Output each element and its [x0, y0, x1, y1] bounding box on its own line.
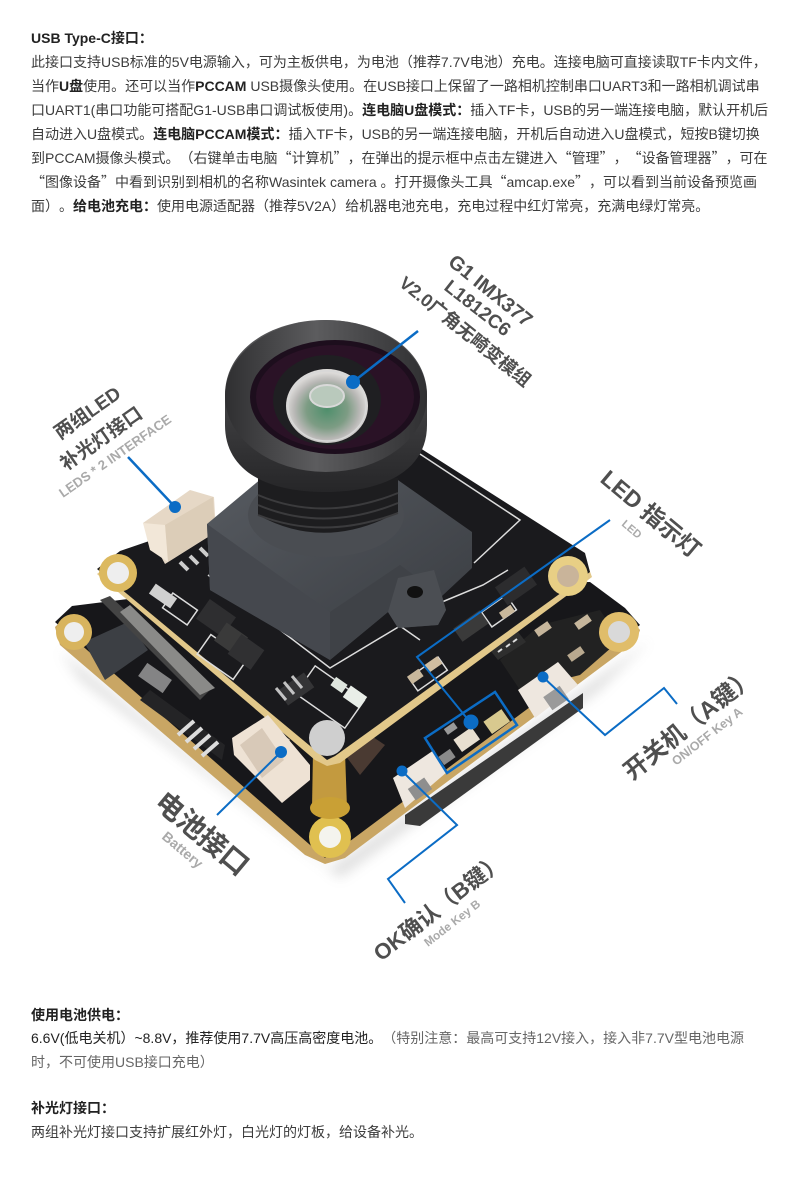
text block: USB Type-C description: “图像设备”中看到识别到相机的名称Wasintek camera 。打开摄像头工具“amcap.exe”，可以看到当前设备预览画: [31, 172, 757, 192]
callout: lens: G1 IMX377: [444, 251, 536, 332]
screw: [309, 720, 345, 756]
callout: power key A: ON/OFF Key A: [669, 705, 745, 768]
brass standoff: [312, 752, 347, 808]
text block: battery power: 6.6V(低电关机）~8.8V，推荐使用7.7V高压高密度电池。（特别注意：最高可支持12V接入，接入非7.7V型电池电源: [31, 1030, 744, 1046]
text block: fill light interface: 补光灯接口：: [31, 1100, 115, 1116]
callout: battery: Battery: [159, 828, 206, 871]
callout: power key A: [538, 663, 761, 786]
text block: USB Type-C description: USB Type-C接口：: [31, 30, 153, 46]
callout: LED light interface: 补光灯接口: [56, 403, 147, 475]
callout: LED indicator: LED: [619, 518, 644, 541]
mounting holes lower board: [56, 612, 639, 858]
switch A: [518, 662, 578, 718]
threaded barrel: [258, 478, 398, 533]
callout: LED indicator: [417, 465, 705, 773]
text block: USB Type-C description: 当作U盘使用。还可以当作PCCAM USB摄像头使用。在USB接口上保留了一路相机控制串口UART3和一路相机调试串: [31, 78, 760, 94]
drop shadow: [60, 640, 650, 878]
text block: USB Type-C description: 到PCCAM摄像头模式。（右键单击电脑“计算机”，在弹出的提示框中点击左键进入“管理”，“设备管理器”，可在: [31, 148, 768, 168]
inner lens: [250, 340, 420, 454]
callout: battery: [149, 746, 287, 882]
switch B: [393, 750, 447, 808]
text block: battery power: 时，不可使用USB接口充电）: [31, 1054, 214, 1070]
text block: fill light interface: 两组补光灯接口支持扩展红外灯，白光灯的灯板，给设备补光。: [31, 1124, 423, 1140]
callout: LED indicator: LED 指示灯: [596, 465, 705, 563]
lower board: [55, 587, 640, 864]
callout: lens: [346, 251, 536, 391]
LED connector: [143, 490, 216, 564]
callout: key B: [369, 766, 509, 966]
LEDs on board: [453, 727, 480, 752]
text block: USB Type-C description: [31, 30, 768, 214]
text block: USB Type-C description: 口UART1(串口功能可搭配G1-USB串口调试板使用)。连电脑U盘模式：插入TF卡，USB的另一端连接电脑，默认开机后: [31, 102, 768, 118]
camera board illustration: [55, 320, 650, 878]
callout: battery: 电池接口: [149, 786, 255, 882]
silk outlines: [163, 454, 520, 728]
callout: LED light interface: [50, 382, 181, 513]
callout: key B: Mode Key B: [421, 897, 483, 949]
upper board components: [149, 567, 537, 747]
SD card slot: [405, 693, 583, 826]
upper mounting holes: [99, 554, 588, 596]
callout: LED light interface: LEDS * 2 INTERFACE: [56, 412, 174, 500]
callout: lens: L1812C6: [440, 276, 514, 341]
callout: LED light interface: 两组LED: [50, 382, 125, 444]
text block: USB Type-C description: 自动进入U盘模式。连电脑PCCAM模式：插入TF卡，USB的另一端连接电脑，开机后自动进入U盘模式，短按B键切换: [31, 126, 760, 142]
callout: key B: OK确认（B键）: [369, 848, 509, 966]
battery connector: [232, 715, 310, 803]
text block: USB Type-C description: 面）。给电池充电：使用电源适配器（推荐5V2A）给机器电池充电，充电过程中红灯常亮，充满电绿灯常亮。: [31, 198, 709, 214]
glass: [286, 369, 368, 443]
text block: USB Type-C description: 此接口支持USB标准的5V电源输入，可为主板供电，为电池（推荐7.7V电池）充电。连接电脑可直接读取TF卡内文件，: [31, 54, 767, 70]
lens outer ring: [225, 320, 427, 492]
text block: battery power: 使用电池供电：: [31, 1007, 129, 1023]
callout: lens: V2.0广角无畸变模组: [395, 272, 535, 391]
callout: power key A: 开关机（A键）: [619, 663, 761, 786]
holder collar: [248, 473, 404, 557]
connector pins: [180, 548, 208, 570]
upper board edge and surface: [97, 453, 592, 766]
text block: fill light interface: [31, 1100, 423, 1140]
lens holder: [207, 478, 472, 660]
text block: battery power: [31, 1007, 744, 1070]
lower board components: [84, 596, 620, 775]
